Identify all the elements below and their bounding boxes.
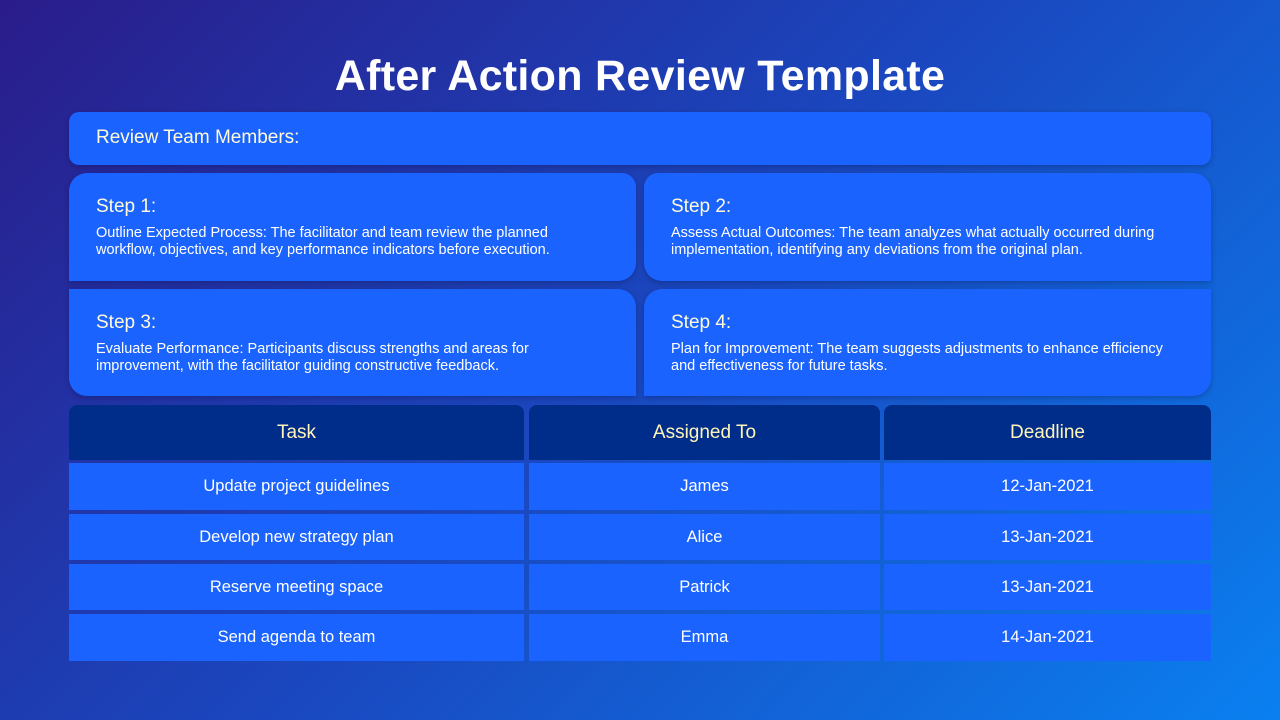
row 4: 14-Jan-2021 <box>1001 628 1094 646</box>
header: task: Task <box>277 422 316 442</box>
row 4 <box>69 614 1211 661</box>
panel: step 1: Outline Expected Process: The facilitator and team review the planned workflow, objectives, and key performance indicators before execution. <box>96 225 550 258</box>
panel: step 3 <box>69 289 636 396</box>
row 3: Reserve meeting space <box>210 578 383 596</box>
header: assigned to: Assigned To <box>653 422 756 442</box>
panel: step 4 <box>644 289 1211 396</box>
row 3: 13-Jan-2021 <box>1001 578 1094 596</box>
row 1: 12-Jan-2021 <box>1001 477 1094 495</box>
panel: step 2 <box>644 173 1211 281</box>
title: After Action Review Template <box>335 52 945 100</box>
panel: step 2: Step 2: <box>671 196 731 217</box>
row 4: Send agenda to team <box>218 628 375 646</box>
row 3: Patrick <box>679 578 730 596</box>
panel: step 3: Evaluate Performance: Participants discuss strengths and areas for improvement, with the facilitator guiding constructive feedback. <box>96 341 529 374</box>
row 3 <box>69 564 1211 610</box>
panel: step 4: Plan for Improvement: The team suggests adjustments to enhance efficiency and effectiveness for future tasks. <box>671 341 1163 374</box>
row 2: Alice <box>687 528 722 546</box>
row 4: Emma <box>681 628 728 646</box>
row 1: Update project guidelines <box>203 477 390 495</box>
header: task <box>69 405 524 460</box>
panel: step 2: Assess Actual Outcomes: The team analyzes what actually occurred during implementation, identifying any deviations from the original plan. <box>671 225 1154 258</box>
header: deadline: Deadline <box>1010 422 1085 442</box>
panel: review team members <box>69 112 1211 165</box>
panel: step 1: Step 1: <box>96 196 156 217</box>
panel: step 4: Step 4: <box>671 312 731 333</box>
row 2 <box>69 514 1211 560</box>
panel: step 1 <box>69 173 636 281</box>
header: deadline <box>884 405 1211 460</box>
panel: review team members: Review Team Members: <box>96 127 299 148</box>
panel: step 3: Step 3: <box>96 312 156 333</box>
row 1 <box>69 463 1211 510</box>
row 2: Develop new strategy plan <box>199 528 394 546</box>
table <box>69 405 1211 661</box>
row 2: 13-Jan-2021 <box>1001 528 1094 546</box>
row 1: James <box>680 477 729 495</box>
header: assigned to <box>529 405 880 460</box>
